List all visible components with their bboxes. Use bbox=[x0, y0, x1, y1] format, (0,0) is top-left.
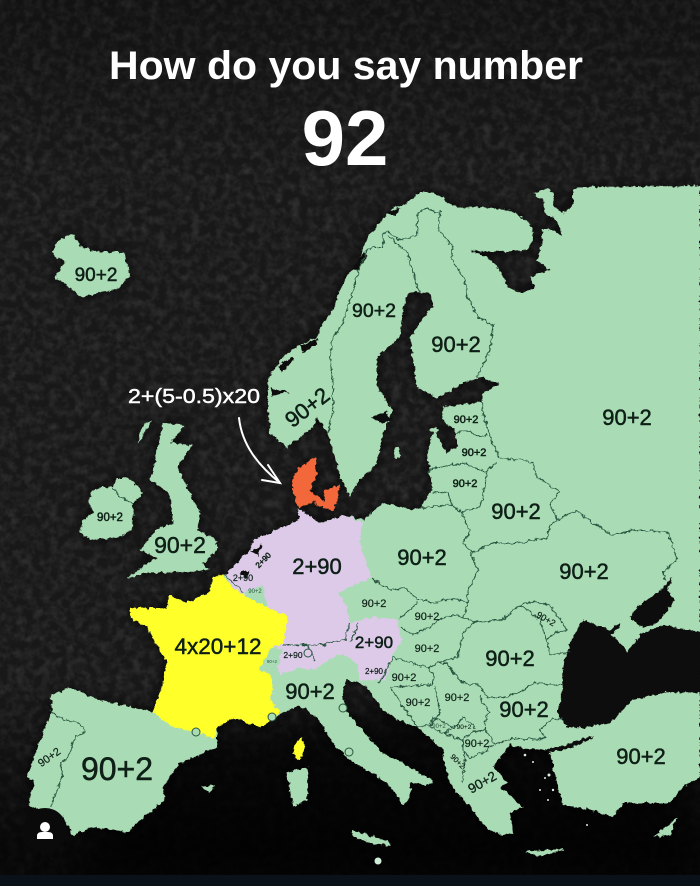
title: How do you say number bbox=[109, 44, 583, 88]
land: Sardinia bbox=[287, 767, 308, 807]
Sweden label: 90+2 bbox=[352, 300, 396, 322]
land: Great Britain bbox=[127, 423, 217, 578]
land: mainland Europe bbox=[27, 186, 700, 835]
Ukraine label: 90+2 bbox=[559, 559, 609, 584]
Montenegro label: 90+2 bbox=[432, 724, 446, 730]
Austria label: 2+90 bbox=[355, 633, 393, 652]
Portugal label: 90+2 bbox=[36, 746, 63, 770]
Sea of Azov bbox=[630, 577, 675, 628]
North Macedonia label: 90+2 bbox=[465, 738, 489, 750]
Geneva label: 90+2 bbox=[267, 659, 278, 664]
Estonia label: 90+2 bbox=[454, 414, 478, 426]
Finland label: 90+2 bbox=[431, 332, 481, 357]
Turkey label: 90+2 bbox=[616, 744, 666, 769]
Moldova label: 90+2 bbox=[535, 610, 557, 628]
map of Europe bbox=[27, 186, 700, 857]
Belgium Flanders label: 2+90 bbox=[233, 573, 253, 583]
Albania label: 90+2 bbox=[448, 752, 467, 771]
Crimea bbox=[610, 622, 643, 650]
land: Ireland bbox=[80, 478, 143, 540]
Black Sea bbox=[557, 620, 700, 728]
Russia label: 90+2 bbox=[602, 405, 652, 430]
Hungary label: 90+2 bbox=[415, 643, 439, 655]
UK label: 90+2 bbox=[154, 532, 206, 558]
profile avatar icon bbox=[23, 808, 67, 852]
Malta bbox=[374, 858, 382, 864]
Slovakia label: 90+2 bbox=[415, 611, 439, 623]
Romania label: 90+2 bbox=[485, 646, 535, 671]
Iceland label: 90+2 bbox=[75, 265, 117, 286]
microstate circles bbox=[192, 649, 353, 756]
Bulgaria label: 90+2 bbox=[499, 697, 549, 722]
Norway label: 90+2 bbox=[280, 382, 335, 433]
Czechia label: 90+2 bbox=[362, 598, 386, 610]
Bosnia label: 90+2 bbox=[406, 697, 430, 709]
Belarus label: 90+2 bbox=[491, 499, 541, 524]
Geneva region bbox=[260, 648, 283, 672]
coastal islands and fjords bbox=[239, 208, 400, 578]
big number 92: 92 bbox=[302, 94, 388, 182]
Ireland label: 90+2 bbox=[97, 512, 123, 524]
France bbox=[130, 575, 288, 738]
German-speaking countries bbox=[225, 508, 402, 680]
land: Hebrides bbox=[138, 421, 152, 443]
Kosovo label: 90+2 bbox=[457, 724, 472, 731]
France label: 4x20+12 bbox=[175, 634, 261, 659]
Spain label: 90+2 bbox=[81, 751, 153, 787]
Italy label: 90+2 bbox=[285, 679, 335, 704]
Serbia label: 90+2 bbox=[445, 692, 469, 704]
land: Sicily bbox=[352, 830, 391, 846]
Netherlands label: 2+90 bbox=[254, 550, 273, 570]
Switzerland label: 2+90 bbox=[283, 650, 303, 660]
land: Balearic bbox=[202, 785, 215, 793]
Greece label: 90+2 bbox=[465, 768, 499, 797]
Slovenia label: 2+90 bbox=[365, 667, 384, 676]
Wallonia bbox=[243, 585, 268, 607]
Croatia label: 90+2 bbox=[392, 672, 416, 684]
arrow to Denmark bbox=[239, 418, 280, 483]
Poland label: 90+2 bbox=[397, 545, 447, 570]
Aegean islands bbox=[524, 754, 588, 826]
land: Crete bbox=[525, 849, 565, 857]
Latvia label: 90+2 bbox=[462, 447, 486, 459]
national borders bbox=[50, 208, 677, 807]
Corsica bbox=[293, 737, 305, 760]
Sea of Marmara bbox=[545, 736, 594, 753]
Denmark: Zealand bbox=[323, 485, 340, 510]
Denmark: Funen bbox=[312, 494, 326, 506]
Baltic islands and inlets bbox=[370, 412, 438, 459]
Belgium Wallonia label: 90+2 bbox=[248, 589, 262, 595]
Germany label: 2+90 bbox=[292, 554, 342, 579]
Denmark callout: 2+(5-0.5)x20 bbox=[128, 386, 260, 408]
map labels bbox=[36, 265, 666, 797]
Denmark: Jutland bbox=[293, 457, 317, 508]
Lithuania label: 90+2 bbox=[453, 478, 477, 490]
land: Cyprus bbox=[653, 817, 678, 837]
land: Iceland bbox=[52, 233, 130, 297]
